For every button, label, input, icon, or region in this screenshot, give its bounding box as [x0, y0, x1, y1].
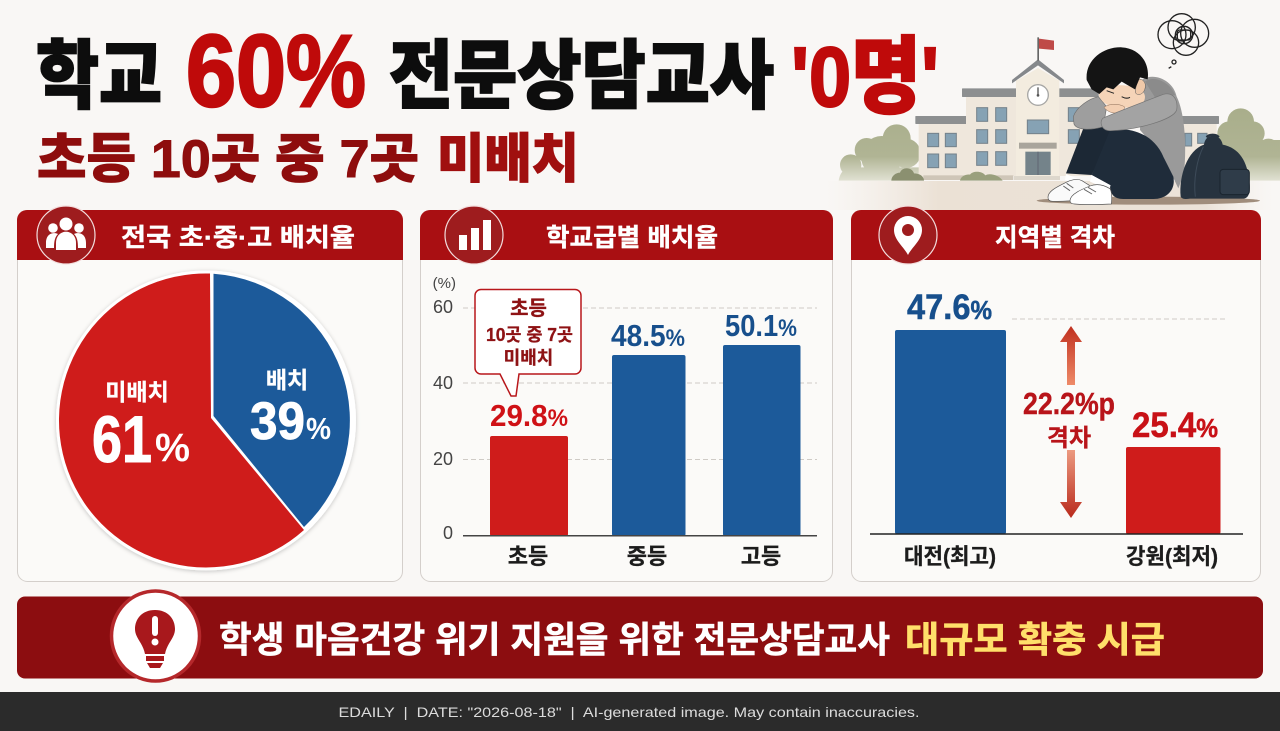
- subtitle: [37, 130, 579, 189]
- subtitle: 미배치: [437, 130, 579, 189]
- pie label: 배치: 39: [250, 392, 305, 451]
- title: 학교: [36, 34, 162, 118]
- icon: people: [37, 206, 95, 264]
- school building: [891, 37, 1219, 181]
- title: [36, 14, 939, 128]
- callout: [475, 290, 581, 396]
- pie label: 미배치: %: [155, 426, 190, 470]
- icon: warning bulb: [112, 591, 200, 681]
- pie label: 미배치: [92, 379, 190, 476]
- bar chart: (%): [433, 275, 456, 292]
- panel: 지역별 격차: [851, 206, 1261, 582]
- title: '0명': [791, 30, 939, 124]
- bar: 초등: [490, 398, 568, 536]
- pie label: 미배치: 미배치: [105, 379, 169, 405]
- callout: 미배치: [504, 348, 553, 368]
- callout: 10곳 중 7곳: [486, 325, 573, 345]
- panel header: [17, 210, 403, 260]
- panel heading: 지역별 격차: [995, 224, 1115, 252]
- bar chart: 60: [433, 297, 453, 317]
- panel heading: 학교급별 배치율: [546, 224, 718, 252]
- panel header: [420, 210, 833, 260]
- icon: bar chart: [445, 206, 503, 264]
- bar chart: 초등: [508, 544, 548, 569]
- illustration: sad student in front of school: [827, 14, 1280, 210]
- hoodie body: [1140, 77, 1185, 188]
- pie label: 미배치: 61: [92, 402, 152, 476]
- footer: EDAILY | DATE: "2026-08-18" | AI-generated image. May contain inaccuracies.: [338, 704, 920, 720]
- trousers: [1066, 125, 1113, 175]
- panel heading: 전국 초·중·고 배치율: [121, 224, 355, 252]
- pie label: 배치: %: [306, 411, 331, 446]
- bar chart: 0: [443, 523, 453, 543]
- gap label: 22.2%p: [1023, 386, 1115, 421]
- footer: [0, 692, 1280, 731]
- bar: 대전: [895, 288, 1006, 534]
- bar: 중등: [611, 318, 686, 536]
- shoes: [1048, 174, 1112, 204]
- regional bar chart: 강원(최저): [1126, 544, 1218, 569]
- panel: 전국 초·중·고 배치율: [17, 206, 403, 582]
- bar: 고등: 50.1%: [725, 308, 797, 343]
- banner message: 대규모 확충 시급: [905, 619, 1165, 660]
- bar chart: 20: [433, 449, 453, 469]
- regional bar chart: 대전(최고): [904, 544, 996, 569]
- bar chart: 고등: [741, 544, 781, 569]
- panel: 학교급별 배치율: [420, 206, 833, 582]
- thought scribble: [1158, 14, 1209, 68]
- pie label: 배치: 배치: [266, 367, 308, 393]
- bar: 대전: 47.6%: [907, 288, 992, 327]
- title: 전문상담교사: [389, 34, 774, 118]
- head: [1087, 47, 1148, 108]
- pie chart: [56, 270, 356, 570]
- panel header: [851, 210, 1261, 260]
- far arm: [1073, 97, 1107, 129]
- pie label: 배치: [250, 367, 331, 451]
- bar: 고등: [723, 308, 800, 536]
- regional bar chart: [870, 288, 1243, 569]
- bar chart: 40: [433, 373, 453, 393]
- bar: 중등: 48.5%: [611, 318, 685, 353]
- bar chart: [433, 275, 817, 569]
- bar chart: 중등: [627, 544, 667, 569]
- bar: 강원: [1126, 406, 1220, 534]
- shadow: [1037, 197, 1260, 205]
- gap label: [1023, 386, 1115, 452]
- bar: 초등: 29.8%: [490, 398, 568, 433]
- arrow: gap: [1060, 326, 1082, 518]
- callout: 초등: [510, 297, 547, 320]
- icon: map pin: [879, 206, 937, 264]
- ground: [827, 181, 1273, 210]
- subtitle: 초등 10곳 중 7곳: [37, 130, 419, 189]
- hands and near arm: [1104, 104, 1125, 113]
- trees: [839, 108, 1280, 181]
- banner message: 학생 마음건강 위기 지원을 위한 전문상담교사: [219, 619, 890, 660]
- gap label: 격차: [1047, 425, 1091, 452]
- backpack: [1180, 136, 1250, 199]
- title: 60%: [186, 14, 366, 128]
- bar: 강원: 25.4%: [1132, 406, 1218, 445]
- banner: [17, 591, 1263, 681]
